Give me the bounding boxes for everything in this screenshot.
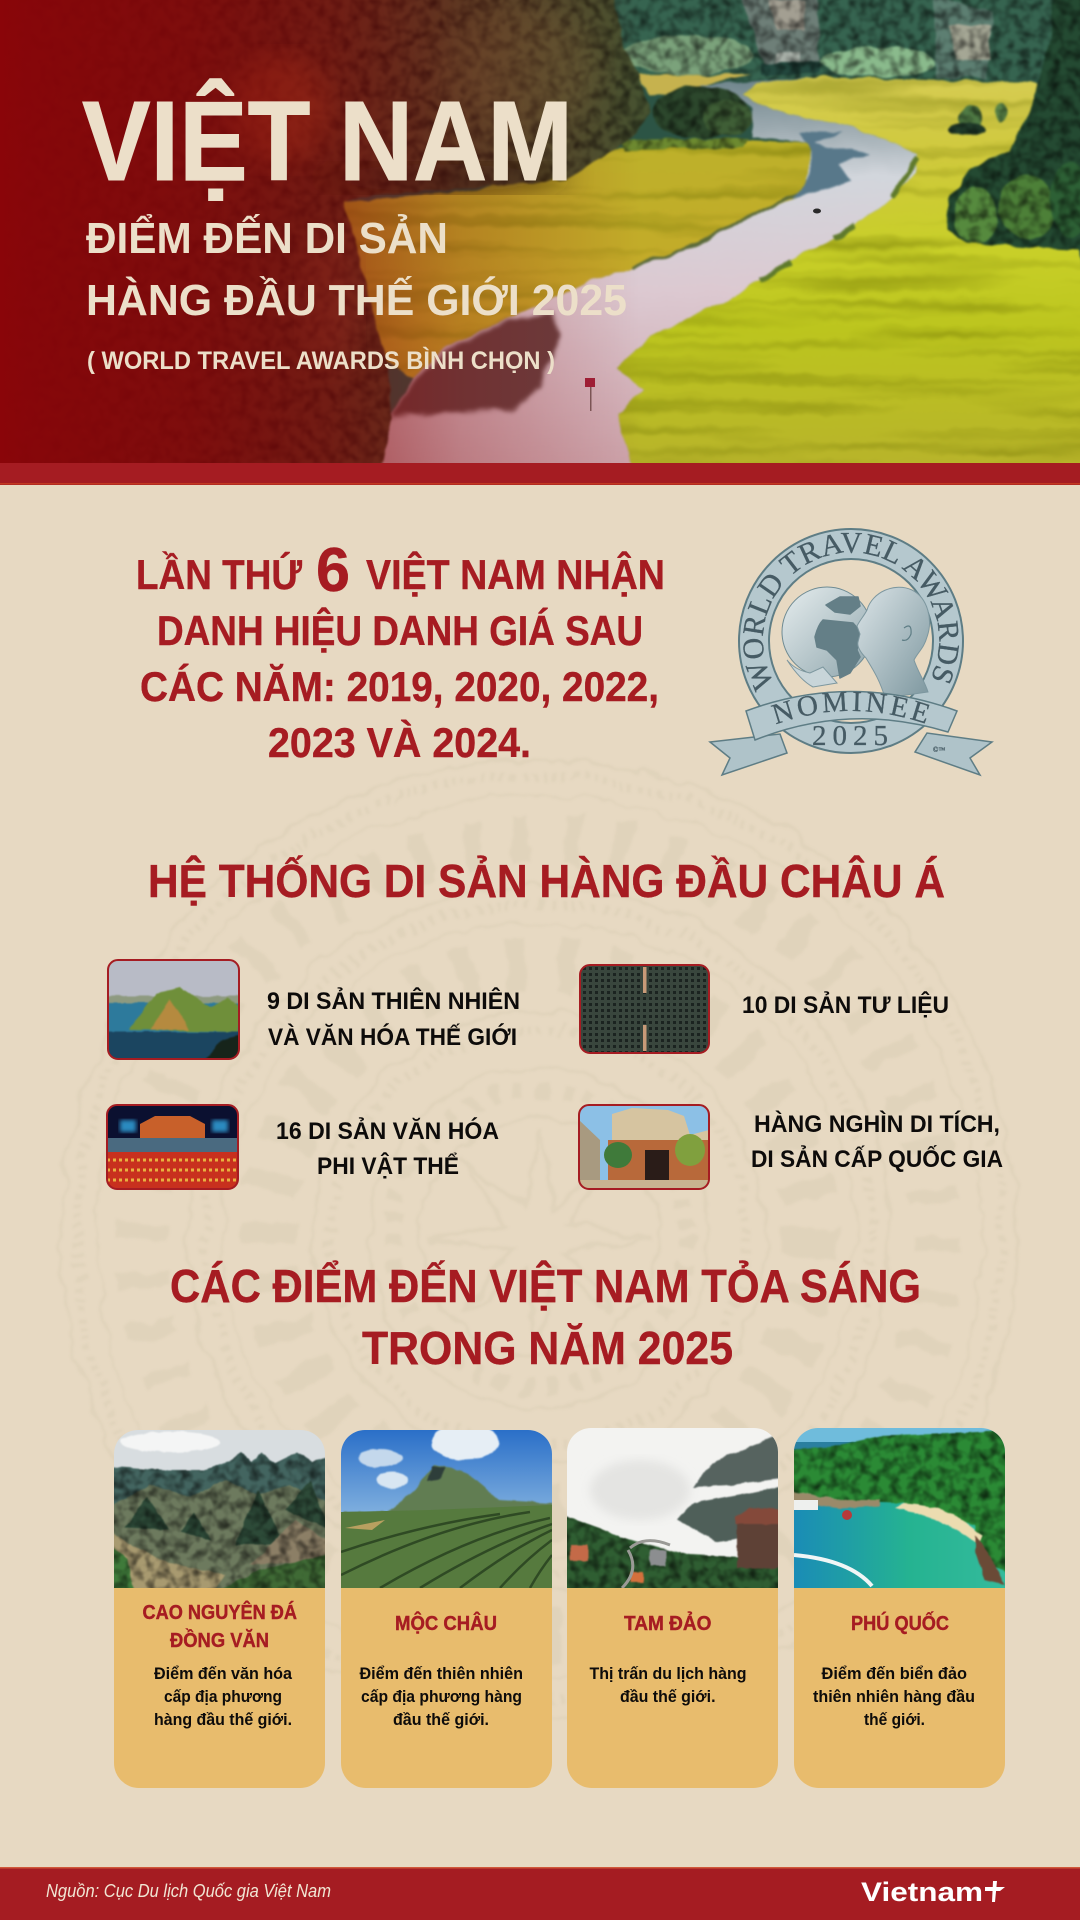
- card text: Điểm đến biển đảo: [822, 1664, 967, 1683]
- thumbnail: temple gate: [579, 1105, 709, 1189]
- subtitle line 2: HÀNG ĐẦU THẾ GIỚI 2025: [86, 275, 627, 325]
- left rice field: [345, 140, 810, 377]
- statement text: [136, 536, 665, 766]
- card text: Điểm đến văn hóa: [154, 1664, 293, 1683]
- subtitle line 1: ĐIỂM ĐẾN DI SẢN: [86, 212, 448, 263]
- heading: destinations: TRONG NĂM 2025: [362, 1322, 733, 1374]
- panel: Dong Van card: [114, 1430, 325, 1788]
- body: [794, 1588, 1005, 1788]
- photo: misty town: [567, 1428, 778, 1588]
- panel: Phu Quoc card: thế giới.: [864, 1710, 925, 1729]
- watermark: bronze drum emblem: [61, 760, 1017, 1716]
- nominee text: NOMINEE: [770, 692, 930, 724]
- item: intangible heritage: [107, 1105, 499, 1189]
- heading: destinations: [170, 1260, 921, 1374]
- item: intangible heritage: PHI VẬT THỂ: [317, 1152, 459, 1180]
- hand: [787, 660, 837, 687]
- card text: Thị trấn du lịch hàng: [590, 1664, 746, 1683]
- river shadows: [793, 132, 870, 198]
- panel: Tam Dao card: đầu thế giới.: [620, 1687, 716, 1706]
- red band under hero: [0, 463, 1080, 485]
- statement text: LẦN THỨ: [136, 550, 302, 598]
- label: HÀNG NGHÌN DI TÍCH,: [754, 1110, 1000, 1138]
- card text: Điểm đến thiên nhiên: [360, 1664, 523, 1683]
- panel: Phu Quoc card: [785, 1428, 1015, 1788]
- continents: [815, 597, 860, 678]
- item: national relics: DI SẢN CẤP QUỐC GIA: [751, 1144, 1003, 1173]
- heading: destinations: CÁC ĐIỂM ĐẾN VIỆT NAM TỎA SÁNG: [170, 1260, 921, 1312]
- panel: Moc Chau card: cấp địa phương hàng: [361, 1687, 522, 1706]
- head: [857, 587, 929, 698]
- red gradient overlay: [0, 0, 640, 463]
- card title: MỘC CHÂU: [395, 1611, 497, 1635]
- main title: VIỆT NAM: [82, 78, 573, 204]
- far limestone cliffs: [600, 0, 1080, 80]
- river: [372, 77, 917, 480]
- logo: Vietnam+: Vietnam: [861, 1877, 983, 1907]
- ring: [739, 529, 963, 753]
- panel: Moc Chau card: đầu thế giới.: [393, 1710, 489, 1729]
- globe: [782, 587, 872, 677]
- footer bar: [0, 1867, 1080, 1920]
- item: natural and cultural heritage: [107, 959, 518, 1060]
- boat and sign: [585, 208, 821, 411]
- panel: Dong Van card: ĐỒNG VĂN: [170, 1628, 269, 1652]
- badge: World Travel Awards Nominee 2025: [708, 528, 994, 776]
- cliff colour blotches: [230, 10, 600, 370]
- source: Nguồn: Cục Du lịch Quốc gia Việt Nam: [46, 1881, 331, 1901]
- hero panel: river landscape photo: [0, 0, 1080, 490]
- thumbnail: woodblock script: [580, 965, 709, 1053]
- body: [341, 1588, 552, 1788]
- thumbnail: Ha Long Bay: [107, 959, 240, 1060]
- trademark: ©™: [933, 746, 945, 754]
- card title: TAM ĐẢO: [624, 1612, 712, 1635]
- ear: [902, 626, 911, 640]
- title: [82, 78, 627, 375]
- item: national relics: [579, 1105, 1003, 1189]
- photo: island bay: [785, 1428, 1015, 1588]
- thumbnail: night festival: [107, 1105, 238, 1189]
- photo: tea hills: [341, 1424, 552, 1588]
- item: natural and cultural heritage: VÀ VĂN HÓA THẾ GIỚI: [268, 1023, 517, 1051]
- label: 10 DI SẢN TƯ LIỆU: [742, 990, 949, 1019]
- left cliff: [114, 0, 651, 463]
- photo: karst plateau: [114, 1430, 325, 1588]
- river bank grass: [760, 158, 917, 280]
- statement text: 2023 VÀ 2024.: [268, 719, 531, 766]
- body: [114, 1588, 325, 1788]
- card title: CAO NGUYÊN ĐÁ: [142, 1600, 297, 1624]
- card title: PHÚ QUỐC: [851, 1611, 949, 1635]
- heading: heritage system: HỆ THỐNG DI SẢN HÀNG ĐẦU CHÂU Á: [148, 855, 945, 907]
- year: 2025: [812, 720, 888, 752]
- panel: Tam Dao card: [567, 1428, 778, 1788]
- statement text: VIỆT NAM NHẬN: [366, 550, 665, 598]
- panel: Phu Quoc card: thiên nhiên hàng đầu: [813, 1687, 975, 1706]
- body: [567, 1588, 778, 1788]
- right cliff with trees: [947, 0, 1080, 250]
- award note: ( WORLD TRAVEL AWARDS BÌNH CHỌN ): [87, 346, 555, 375]
- statement text: 6: [316, 536, 350, 605]
- distant field: [637, 75, 750, 95]
- panel: Moc Chau card: [341, 1424, 552, 1788]
- label: 16 DI SẢN VĂN HÓA: [276, 1116, 499, 1145]
- statement text: DANH HIỆU DANH GIÁ SAU: [157, 606, 643, 654]
- right rice field: [617, 77, 1080, 480]
- tree clusters: [620, 86, 1007, 150]
- panel: Dong Van card: cấp địa phương: [164, 1687, 282, 1706]
- ribbon: [746, 692, 957, 740]
- label: 9 DI SẢN THIÊN NHIÊN: [267, 986, 520, 1015]
- statement text: CÁC NĂM: 2019, 2020, 2022,: [140, 663, 659, 710]
- panel: Dong Van card: hàng đầu thế giới.: [154, 1710, 292, 1729]
- item: documentary heritage: [580, 965, 949, 1053]
- ribbon tails: [710, 734, 787, 775]
- ring text: WORLD TRAVEL AWARDS: [743, 532, 960, 693]
